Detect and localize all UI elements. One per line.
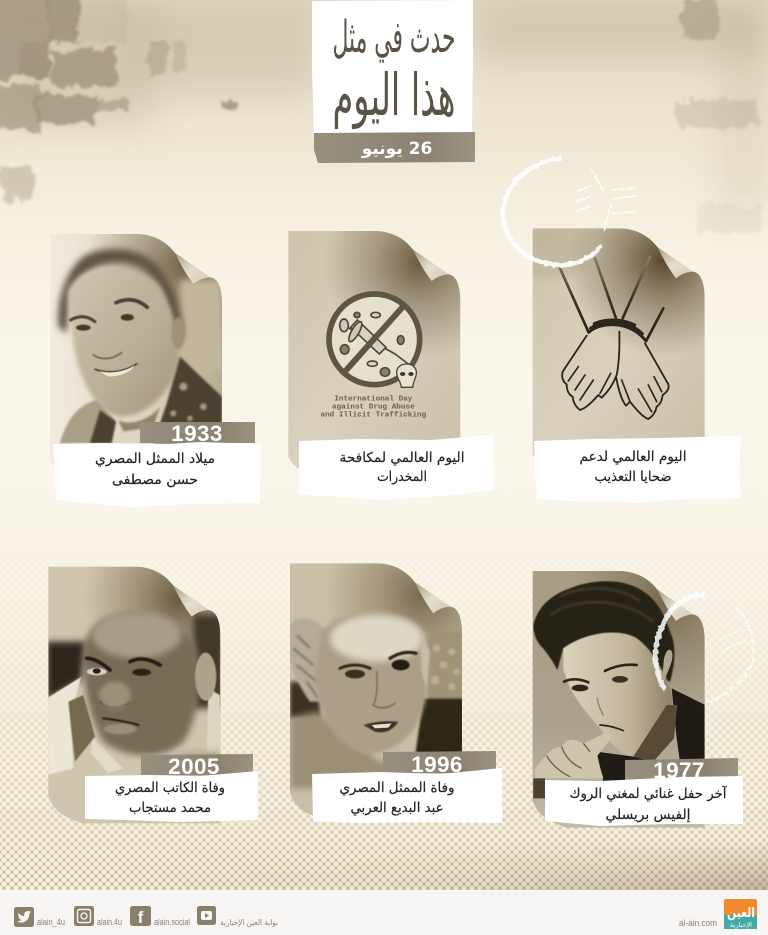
poster caption: and Illicit Trafficking <box>320 412 427 420</box>
coffee ring stain top <box>503 158 635 265</box>
torn label: وفاة الكاتب المصري <box>115 780 225 796</box>
torn label: اليوم العالمي لدعم <box>580 449 686 465</box>
year ribbon <box>141 754 253 779</box>
poster caption <box>320 395 427 420</box>
photo of Mohamed Mostagab <box>47 567 223 823</box>
photo of Abdel Badie El Araby <box>290 563 463 820</box>
newspaper collage texture <box>0 0 768 233</box>
website: al-ain.com <box>679 918 717 928</box>
syringe <box>340 319 408 364</box>
torn label: محمد مستجاب <box>129 800 211 816</box>
torn label: المخدرات <box>377 469 427 485</box>
pills <box>340 312 404 376</box>
card: Mohamed Mostagab 2005 <box>47 567 258 823</box>
title white sheet <box>312 0 473 136</box>
torn label <box>299 435 494 500</box>
year ribbon: 2005 <box>168 754 220 779</box>
card: torture victims day <box>532 228 741 502</box>
poster caption: International Day <box>334 395 413 403</box>
torn label <box>545 776 743 826</box>
icon: no drugs sign <box>329 294 420 387</box>
photo of Hassan Mostafa <box>50 234 222 474</box>
year ribbon <box>625 758 738 783</box>
year ribbon <box>140 421 255 446</box>
title text: هذا اليوم <box>332 61 456 130</box>
icon: instagram <box>74 906 94 926</box>
year ribbon: 1933 <box>171 421 223 446</box>
halftone dots band <box>0 594 768 890</box>
skull <box>397 364 416 387</box>
title text <box>332 12 456 130</box>
photo of Elvis Presley <box>533 571 705 828</box>
icon: bound hands <box>560 257 669 419</box>
date ribbon <box>314 132 475 163</box>
torn label: إلفيس بريسلي <box>606 807 690 823</box>
torn label: ميلاد الممثل المصري <box>95 451 215 467</box>
title panel <box>312 0 475 163</box>
card: Abdel Badie El Araby 1996 <box>290 563 502 823</box>
instagram handle: alain.4u <box>97 917 122 927</box>
year ribbon <box>383 751 496 777</box>
paper with bound hands <box>532 228 705 458</box>
torn label <box>312 768 502 823</box>
year ribbon: 1977 <box>653 758 705 783</box>
torn label: حسن مصطفى <box>112 472 198 488</box>
twitter handle: alain_4u <box>37 917 65 927</box>
card: Elvis Presley 1977 <box>533 571 743 828</box>
paper with drug poster <box>288 231 460 471</box>
icon: facebook: f <box>138 908 144 927</box>
torn label <box>53 442 261 507</box>
footer <box>0 890 768 935</box>
icon: youtube <box>197 906 216 925</box>
date ribbon: 26 يونيو <box>361 139 432 159</box>
youtube channel name: بوابة العين الإخبارية <box>220 918 278 928</box>
torn label: آخر حفل غنائي لمغني الروك <box>570 785 728 802</box>
poster caption: against Drug Abuse <box>332 404 415 412</box>
card: Hassan Mostafa 1933 <box>50 234 261 507</box>
logo <box>724 899 757 929</box>
torn label: اليوم العالمي لمكافحة <box>340 450 464 466</box>
torn label: عبد البديع العربي <box>350 800 444 816</box>
logo: الإخبارية <box>730 921 752 929</box>
title panel: حدث في مثل <box>332 12 456 63</box>
card: anti drug day <box>288 231 494 500</box>
facebook handle: alain.social <box>154 917 190 927</box>
torn label: ضحايا التعذيب <box>594 469 672 485</box>
year ribbon: 1996 <box>411 752 463 777</box>
torn label: وفاة الممثل المصري <box>340 780 454 796</box>
icon: twitter <box>14 907 34 927</box>
torn label <box>85 771 258 822</box>
torn label <box>534 436 741 502</box>
coffee ring stain over Elvis <box>655 595 754 702</box>
logo: العين <box>727 906 755 921</box>
icon: facebook <box>130 906 151 927</box>
